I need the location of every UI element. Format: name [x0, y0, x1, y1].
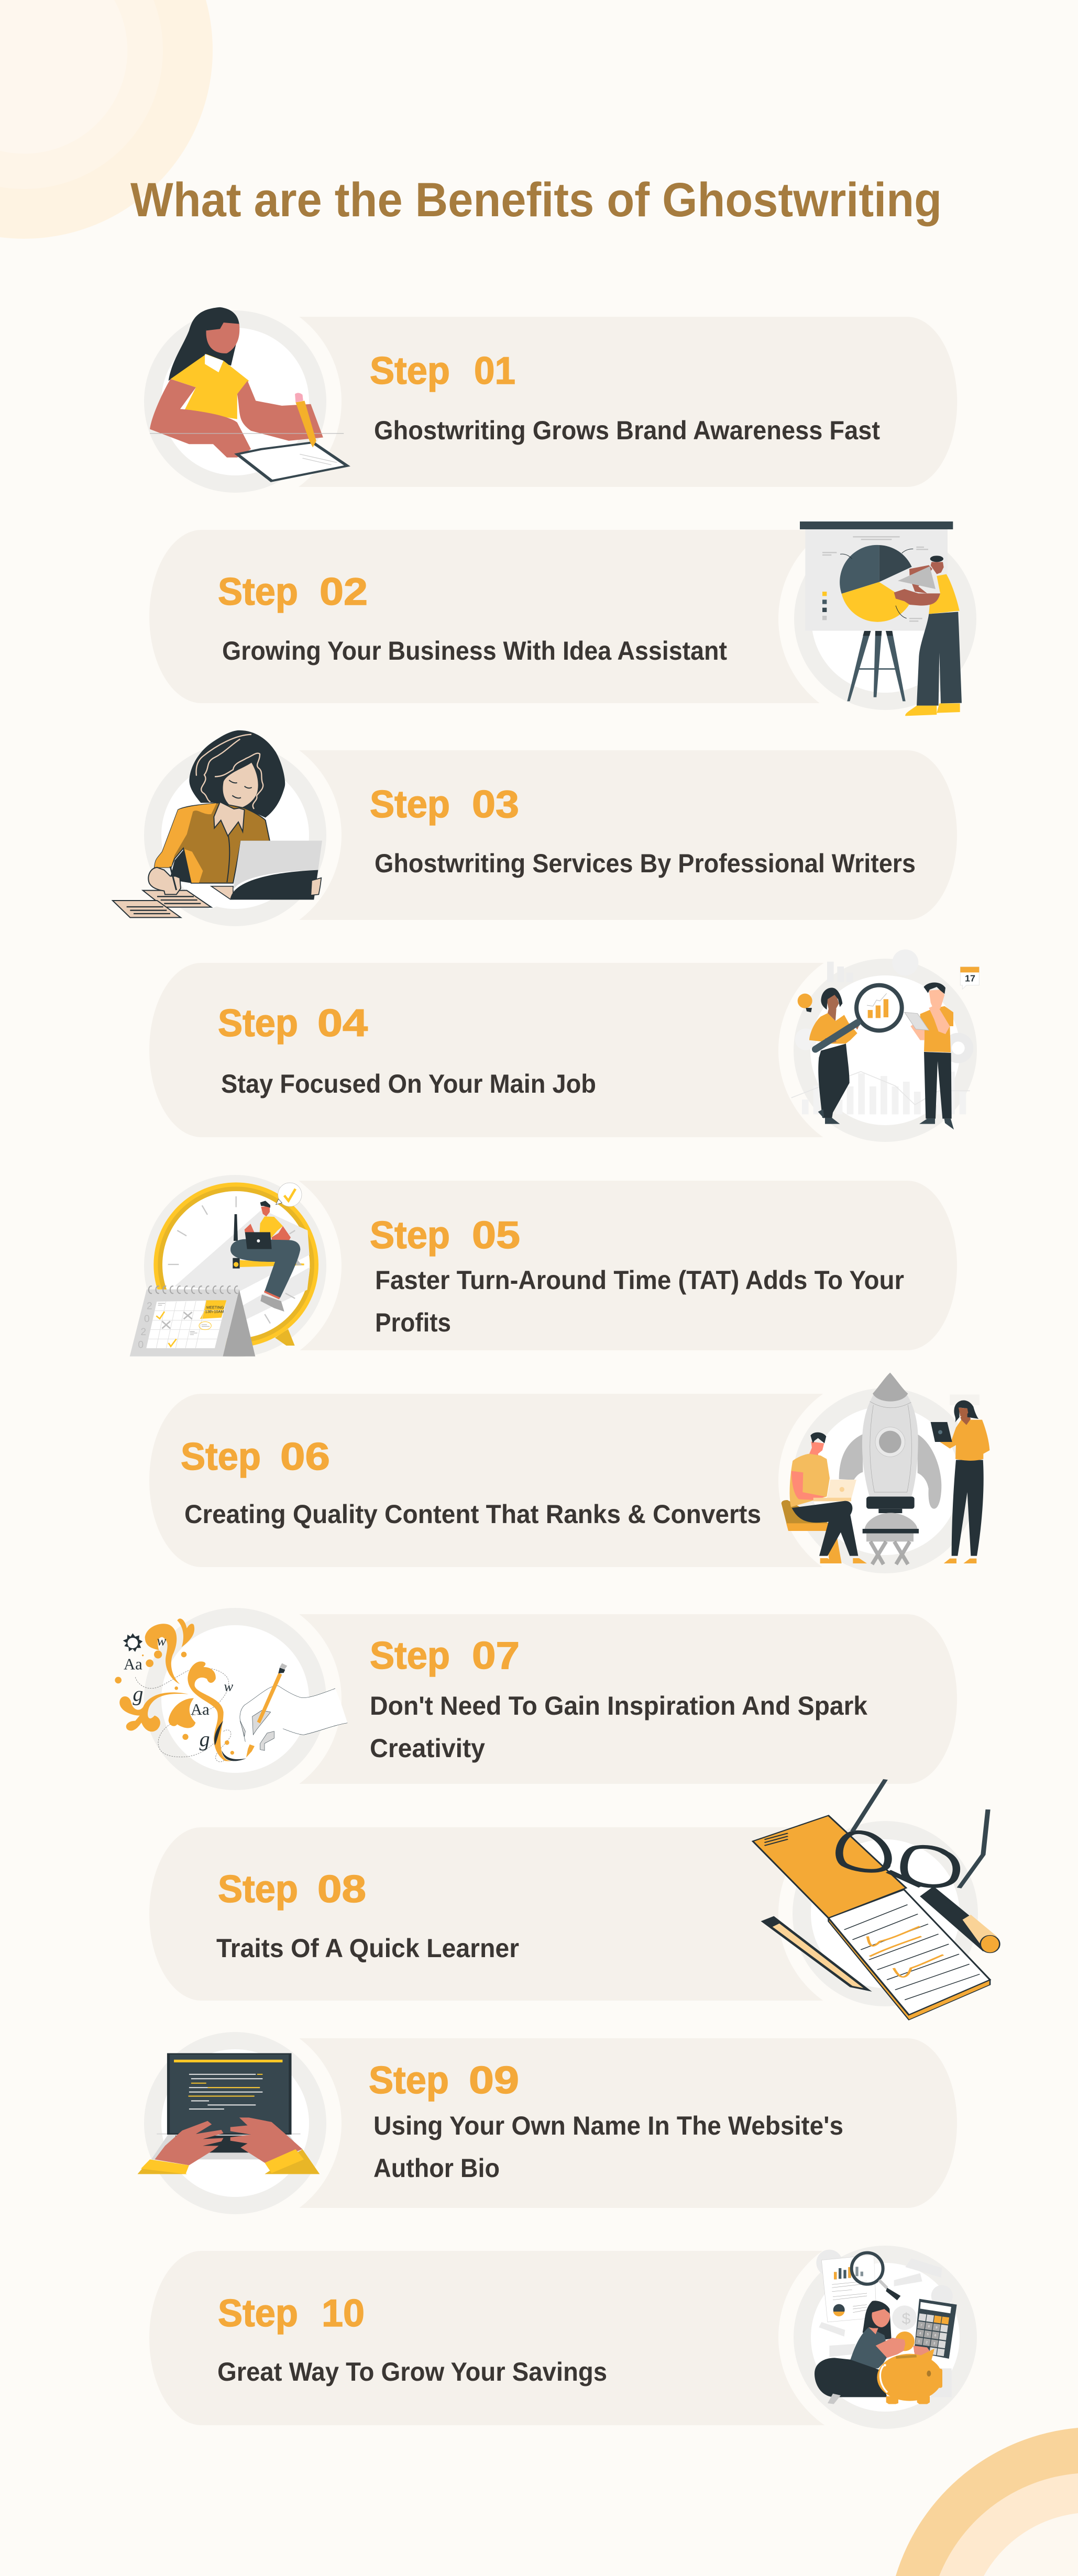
icon: woman saving coins in a piggy bank	[815, 2250, 957, 2404]
heading: step 06	[181, 1436, 330, 1478]
heading: step 04	[218, 1002, 368, 1045]
step 03 row	[113, 729, 957, 941]
icon: hand writing with ornamental flourishes: w	[157, 1633, 166, 1649]
heading: step 06: Step	[181, 1436, 261, 1478]
heading: step 02: Step	[218, 571, 298, 613]
heading: step 01: 01	[474, 350, 515, 392]
icon: woman saving coins in a piggy bank: 4	[919, 2332, 921, 2336]
step 05 row	[129, 1160, 957, 1372]
panel: step 08	[149, 1827, 890, 2001]
heading: step 07: 07	[472, 1635, 520, 1677]
heading: step 09: 09	[469, 2059, 519, 2102]
panel: step 09	[262, 2038, 957, 2208]
text: step 09	[373, 2111, 843, 2183]
heading: step 04: Step	[218, 1002, 298, 1045]
heading: step 10	[218, 2292, 365, 2335]
step 01 row	[129, 295, 957, 508]
panel: step 01	[262, 317, 957, 487]
heading: step 01	[370, 350, 515, 392]
icon: hands typing on a laptop	[137, 2054, 320, 2174]
text: step 09: Author Bio	[373, 2153, 500, 2183]
text: step 10: Great Way To Grow Your Savings	[217, 2357, 607, 2386]
step 08 row	[149, 1780, 999, 2020]
icon: man on a clock with a calendar: 2	[147, 1301, 152, 1312]
icon: woman saving coins in a piggy bank: 1	[918, 2340, 920, 2344]
decoration: bottom-right arcs	[896, 2428, 1078, 2576]
heading: step 08: 08	[317, 1868, 366, 1911]
step 09 row	[129, 2017, 957, 2229]
icon: hand writing with ornamental flourishes: Aa	[191, 1701, 210, 1718]
icon: hand writing with ornamental flourishes: g	[200, 1727, 210, 1751]
icon: woman saving coins in a piggy bank: 2	[926, 2341, 928, 2345]
icon: hand writing with ornamental flourishes: w	[224, 1678, 233, 1694]
icon: curly-haired woman writing at a desk	[113, 730, 322, 917]
icon: two people analysing a chart with a magnifier: 17	[965, 973, 975, 983]
icon: man on a clock with a calendar: 2	[140, 1327, 146, 1338]
icon: woman saving coins in a piggy bank: 6	[934, 2334, 937, 2338]
text: step 01: Ghostwriting Grows Brand Awareness Fast	[374, 416, 880, 445]
icon: man on a clock with a calendar: 0	[144, 1314, 150, 1325]
heading: step 06: 06	[280, 1436, 330, 1478]
icon: two people analysing a chart with a magnifier	[791, 949, 979, 1129]
icon: woman saving coins in a piggy bank: 7	[920, 2324, 922, 2327]
panel: step 02	[149, 530, 890, 703]
heading: step 04: 04	[317, 1002, 368, 1045]
text: step 05	[375, 1265, 904, 1337]
heading: step 02: 02	[320, 571, 368, 613]
heading: step 03: 03	[472, 783, 519, 826]
step 07 row	[115, 1593, 957, 1805]
heading: step 05	[370, 1214, 520, 1257]
icon: hand writing with ornamental flourishes: g	[133, 1682, 143, 1705]
step 02 row	[149, 512, 992, 726]
heading: step 05: 05	[472, 1214, 520, 1257]
text: step 09: Using Your Own Name In The Website's	[373, 2111, 843, 2140]
icon: man on a clock with a calendar: 13th-10AM	[205, 1309, 224, 1314]
text: step 03: Ghostwriting Services By Professional Writers	[375, 849, 916, 878]
panel: step 04	[149, 963, 890, 1137]
text: step 02: Growing Your Business With Idea Assistant	[222, 636, 727, 665]
heading: step 03	[370, 783, 519, 826]
panel: step 07	[262, 1614, 957, 1784]
text: step 07: Don't Need To Gain Inspiration And Spark	[370, 1691, 867, 1720]
heading: step 07: Step	[370, 1635, 450, 1677]
heading: step 09	[369, 2059, 519, 2102]
icon: woman saving coins in a piggy bank: 3	[933, 2342, 936, 2346]
panel: step 05	[262, 1181, 957, 1350]
heading: step 01: Step	[370, 350, 450, 392]
panel: step 03	[262, 750, 957, 920]
icon: woman saving coins in a piggy bank: $	[902, 2310, 911, 2327]
text: step 07: Creativity	[370, 1734, 485, 1763]
decoration: top-left circles	[0, 0, 213, 239]
heading: step 08: Step	[218, 1868, 298, 1911]
icon: woman writing in a notebook	[150, 307, 347, 481]
step 10 row	[149, 2230, 992, 2444]
heading: step 03: Step	[370, 783, 450, 826]
step 06 row	[149, 1373, 992, 1587]
heading: step 08	[218, 1868, 366, 1911]
text: step 08: Traits Of A Quick Learner	[216, 1934, 519, 1963]
heading: step 02	[218, 571, 368, 613]
icon: woman saving coins in a piggy bank: 8	[928, 2325, 930, 2328]
icon: man presenting a pie chart	[800, 521, 962, 716]
heading: step 10: Step	[218, 2292, 298, 2335]
title: What are the Benefits of Ghostwriting	[130, 173, 942, 227]
icon: woman saving coins in a piggy bank: 5	[927, 2333, 929, 2337]
icon: man on a clock with a calendar: 0	[138, 1339, 144, 1350]
text: step 07	[370, 1691, 867, 1763]
icon: man on a clock with a calendar	[130, 1182, 318, 1357]
heading: step 09: Step	[369, 2059, 449, 2102]
heading: step 07	[370, 1635, 520, 1677]
heading: step 10: 10	[322, 2292, 365, 2335]
heading: step 05: Step	[370, 1214, 450, 1257]
icon: rocket with two colleagues	[782, 1373, 989, 1564]
icon: hand writing with ornamental flourishes	[115, 1618, 347, 1762]
panel: step 10	[149, 2251, 890, 2425]
text: step 06: Creating Quality Content That Ranks & Converts	[184, 1500, 761, 1529]
icon: man on a clock with a calendar: MEETING	[206, 1305, 224, 1309]
icon: woman saving coins in a piggy bank: 9	[936, 2326, 938, 2329]
text: step 04: Stay Focused On Your Main Job	[221, 1069, 596, 1098]
step 04 row	[149, 943, 992, 1157]
text: step 05: Profits	[375, 1308, 451, 1337]
panel: step 06	[149, 1394, 890, 1567]
icon: hand writing with ornamental flourishes: Aa	[124, 1655, 142, 1673]
text: step 05: Faster Turn-Around Time (TAT) Adds To Your	[375, 1265, 904, 1295]
icon: notebook, glasses, pen and pencil	[753, 1780, 999, 2020]
